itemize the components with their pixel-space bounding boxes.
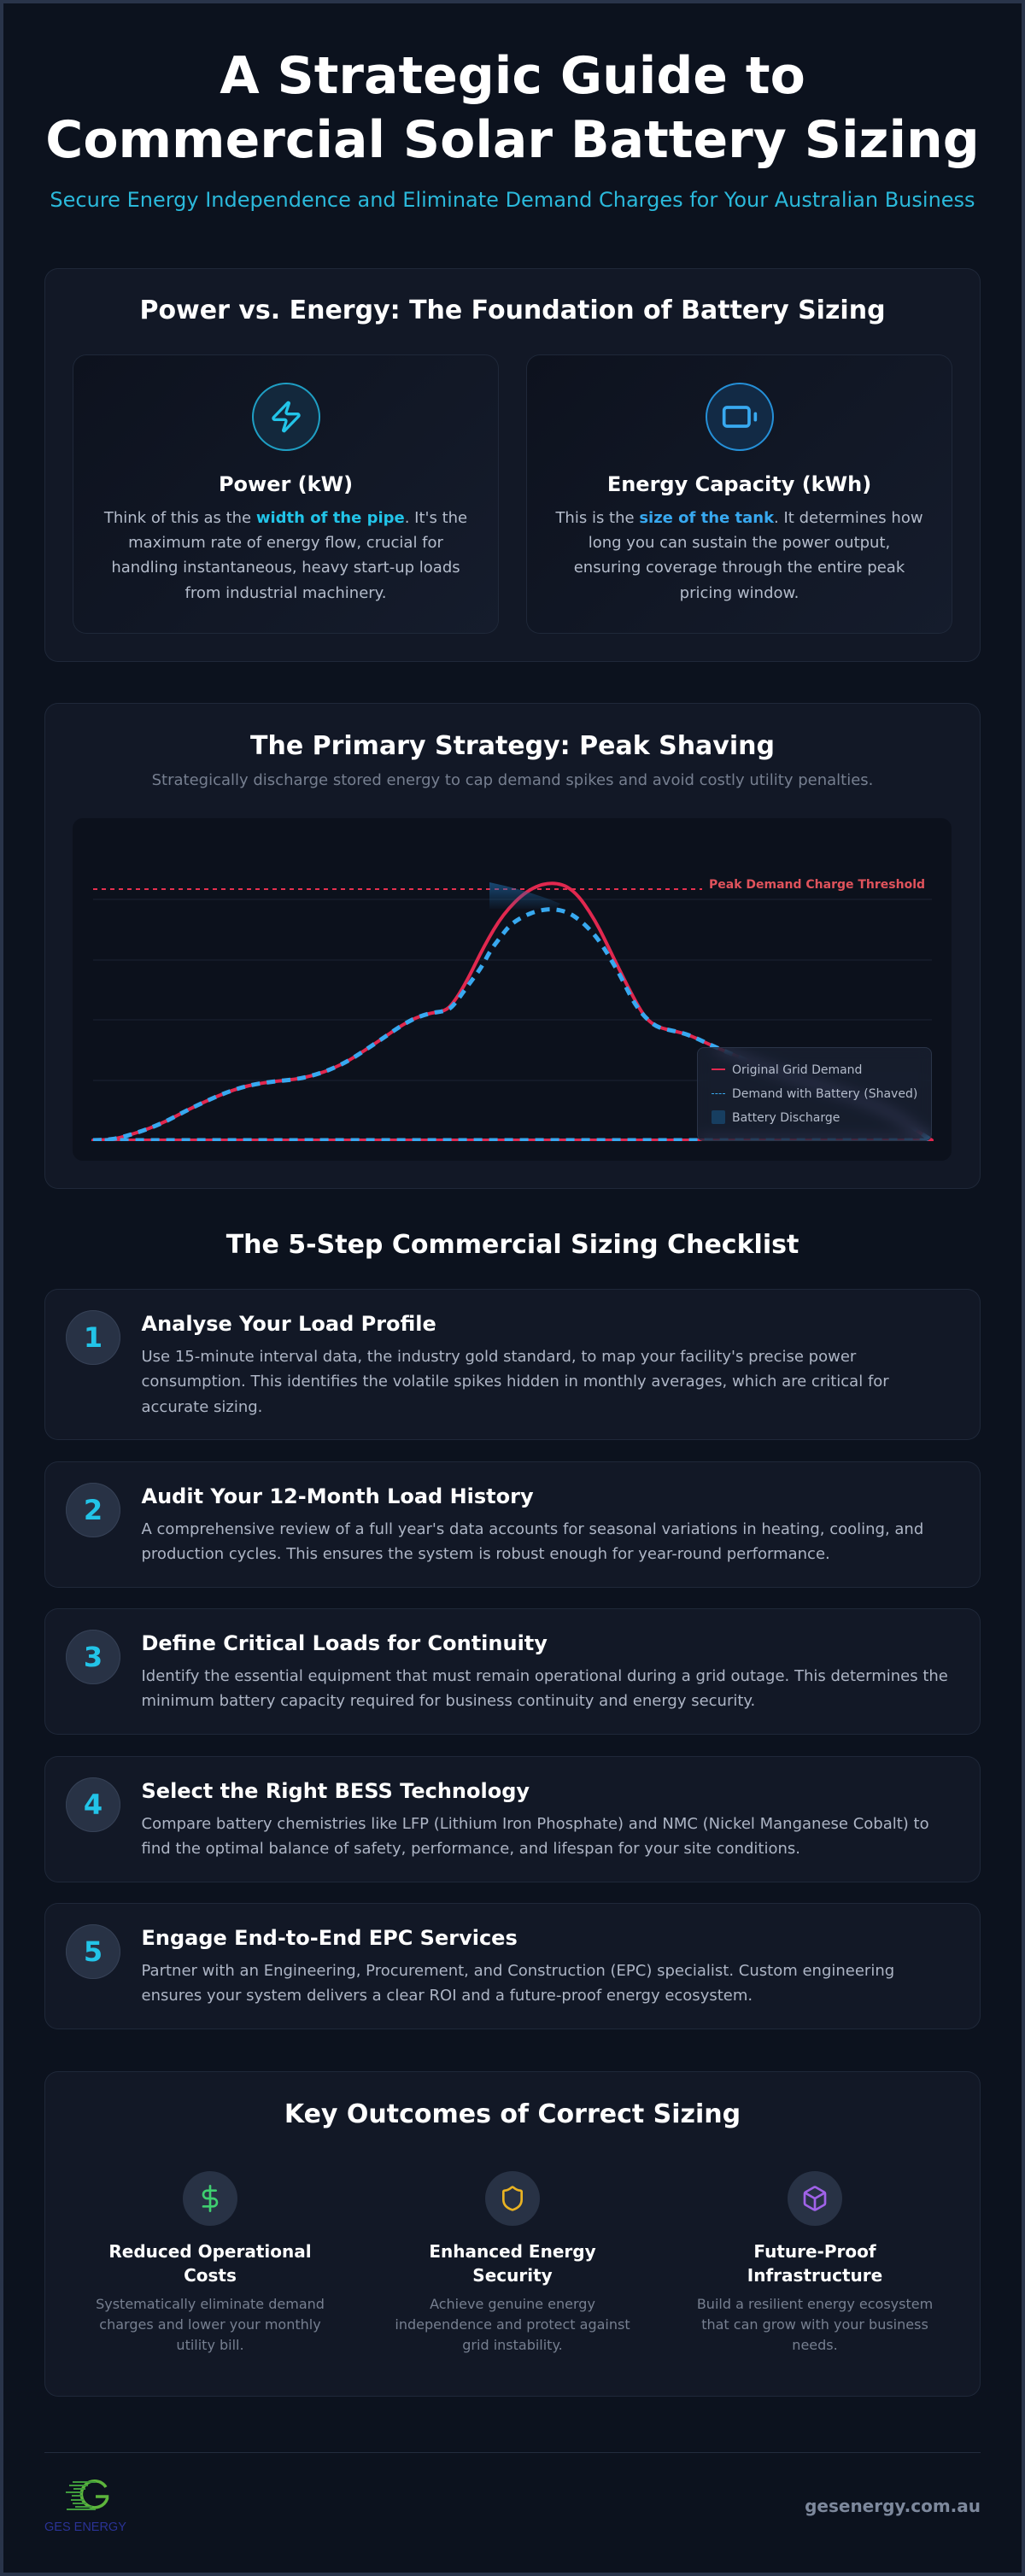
title: Commercial Solar Battery Sizing xyxy=(45,110,980,170)
step 1 xyxy=(44,1289,981,1440)
outcome text: security xyxy=(395,2296,630,2352)
card text: energy capacity xyxy=(555,509,923,602)
icon: shield xyxy=(485,2171,540,2226)
step title: Analyse Your Load Profile xyxy=(142,1312,436,1336)
step text xyxy=(142,1348,889,1416)
panel: power vs energy xyxy=(44,268,981,662)
threshold line xyxy=(93,888,702,890)
card text: energy capacity: long you can sustain the power output, xyxy=(589,534,890,552)
logo mark xyxy=(66,2479,109,2510)
outcome text: security: independence and protect against xyxy=(395,2316,630,2332)
card text: energy capacity: pricing window. xyxy=(680,584,799,602)
step text: consumption. This identifies the volatile spikes hidden in monthly averages, which are critical for xyxy=(142,1373,889,1390)
icon: lightning bolt xyxy=(251,383,319,451)
legend swatch: original xyxy=(712,1068,725,1070)
step text: Partner with an Engineering, Procurement, and Construction (EPC) specialist. Custom engineering xyxy=(142,1962,894,1980)
card text: power xyxy=(104,509,467,602)
outcome title: costs: Costs xyxy=(184,2265,237,2286)
step number xyxy=(66,1630,120,1684)
line chart xyxy=(91,878,934,1141)
outcome text: security: grid instability. xyxy=(462,2337,563,2352)
step text xyxy=(142,1962,894,2005)
step text xyxy=(142,1667,948,1710)
step title: Engage End-to-End EPC Services xyxy=(142,1926,518,1950)
threshold label: Peak Demand Charge Threshold xyxy=(709,878,925,892)
step text: Use 15-minute interval data, the industry gold standard, to map your facility's precise power xyxy=(142,1348,856,1366)
outcome title: infrastructure: Future-Proof xyxy=(753,2241,876,2262)
panel subtitle: Strategically discharge stored energy to cap demand spikes and avoid costly utility penalties. xyxy=(152,771,873,789)
step number: 3 xyxy=(84,1640,102,1672)
outcome text: costs: charges and lower your monthly xyxy=(99,2316,321,2332)
step number: 1 xyxy=(84,1320,102,1353)
icon: dollar xyxy=(183,2171,237,2226)
step number xyxy=(66,1924,120,1979)
legend xyxy=(697,1047,932,1141)
heading: peak shaving: The Primary Strategy: Peak Shaving xyxy=(250,731,775,761)
title: A Strategic Guide to xyxy=(220,46,805,106)
outcome title: costs: Reduced Operational xyxy=(108,2241,312,2262)
outcome title: security xyxy=(429,2241,596,2286)
shaved demand curve xyxy=(93,910,932,1140)
step 3 xyxy=(44,1608,981,1735)
card: power xyxy=(73,354,499,634)
card text: energy capacity: This is the size of the tank. It determines how xyxy=(555,509,923,526)
step title: Select the Right BESS Technology xyxy=(142,1779,530,1803)
outcome title: infrastructure xyxy=(747,2241,882,2286)
website url: gesenergy.com.au xyxy=(805,2496,981,2516)
outcome text: infrastructure: Build a resilient energy ecosystem xyxy=(697,2296,933,2311)
subtitle: Secure Energy Independence and Eliminate Demand Charges for Your Australian Business xyxy=(50,188,975,212)
step number xyxy=(66,1777,120,1832)
outcome title: security: Security xyxy=(472,2265,553,2286)
step 4 xyxy=(44,1756,981,1882)
legend label: original: Original Grid Demand xyxy=(732,1063,862,1077)
panel: key outcomes xyxy=(44,2071,981,2397)
card heading: energy capacity: Energy Capacity (kWh) xyxy=(607,472,871,496)
step title: Define Critical Loads for Continuity xyxy=(142,1631,548,1655)
outcome text: costs xyxy=(96,2296,325,2352)
icon: battery xyxy=(706,383,774,451)
card text: energy capacity: ensuring coverage through the entire peak xyxy=(574,559,905,577)
step text: ensures your system delivers a clear ROI and a future-proof energy ecosystem. xyxy=(142,1987,753,2005)
card text: power: Think of this as the width of the pipe. It's the xyxy=(104,509,467,526)
battery discharge area xyxy=(489,882,560,909)
legend swatch: discharge xyxy=(712,1110,725,1124)
step text: A comprehensive review of a full year's data accounts for seasonal variations in heating, cooling, and xyxy=(142,1520,923,1538)
icon: box xyxy=(788,2171,842,2226)
step text: minimum battery capacity required for business continuity and energy security. xyxy=(142,1692,755,1710)
outcome text: costs: Systematically eliminate demand xyxy=(96,2296,325,2311)
card text: power: from industrial machinery. xyxy=(184,584,386,602)
title xyxy=(45,46,980,170)
outcome text: infrastructure: needs. xyxy=(792,2337,838,2352)
heading: key outcomes: Key Outcomes of Correct Sizing xyxy=(284,2099,741,2129)
step number: 5 xyxy=(84,1935,102,1968)
step title: Audit Your 12-Month Load History xyxy=(142,1484,534,1508)
outcome text: costs: utility bill. xyxy=(176,2337,244,2352)
card text: power: maximum rate of energy flow, crucial for xyxy=(128,534,443,552)
panel: peak shaving xyxy=(44,703,981,1189)
outcome title: costs xyxy=(108,2241,312,2286)
step number: 2 xyxy=(84,1493,102,1525)
original demand curve xyxy=(93,883,932,1140)
outcome text: security: Achieve genuine energy xyxy=(430,2296,595,2311)
heading: checklist: The 5-Step Commercial Sizing Checklist xyxy=(226,1230,799,1260)
step text xyxy=(142,1815,929,1858)
step text xyxy=(142,1520,923,1563)
outcome title: security: Enhanced Energy xyxy=(429,2241,596,2262)
step 2 xyxy=(44,1461,981,1588)
heading: power vs energy: Power vs. Energy: The Foundation of Battery Sizing xyxy=(139,296,886,325)
card text: power: handling instantaneous, heavy start-up loads xyxy=(111,559,460,577)
logo xyxy=(44,2479,126,2534)
step text: Compare battery chemistries like LFP (Lithium Iron Phosphate) and NMC (Nickel Manganese Cobalt) to xyxy=(142,1815,929,1833)
outcome text: infrastructure: that can grow with your business xyxy=(701,2316,928,2332)
step number: 4 xyxy=(84,1789,102,1821)
card heading: power: Power (kW) xyxy=(219,472,353,496)
step text: production cycles. This ensures the system is robust enough for year-round performance. xyxy=(142,1545,830,1563)
step text: find the optimal balance of safety, performance, and lifespan for your site conditions. xyxy=(142,1840,800,1858)
outcome text: infrastructure xyxy=(697,2296,933,2352)
step text: Identify the essential equipment that must remain operational during a grid outage. This determines the xyxy=(142,1667,948,1685)
chart: demand curve xyxy=(73,818,952,1161)
step number xyxy=(66,1483,120,1537)
step text: accurate sizing. xyxy=(142,1398,262,1416)
outcome title: infrastructure: Infrastructure xyxy=(747,2265,882,2286)
card: energy capacity xyxy=(526,354,952,634)
legend swatch: shaved xyxy=(712,1093,725,1094)
legend label: shaved: Demand with Battery (Shaved) xyxy=(732,1087,917,1101)
legend label: discharge: Battery Discharge xyxy=(732,1111,840,1125)
step 5 xyxy=(44,1903,981,2029)
logo text: GES ENERGY xyxy=(44,2520,126,2534)
step number xyxy=(66,1310,120,1365)
